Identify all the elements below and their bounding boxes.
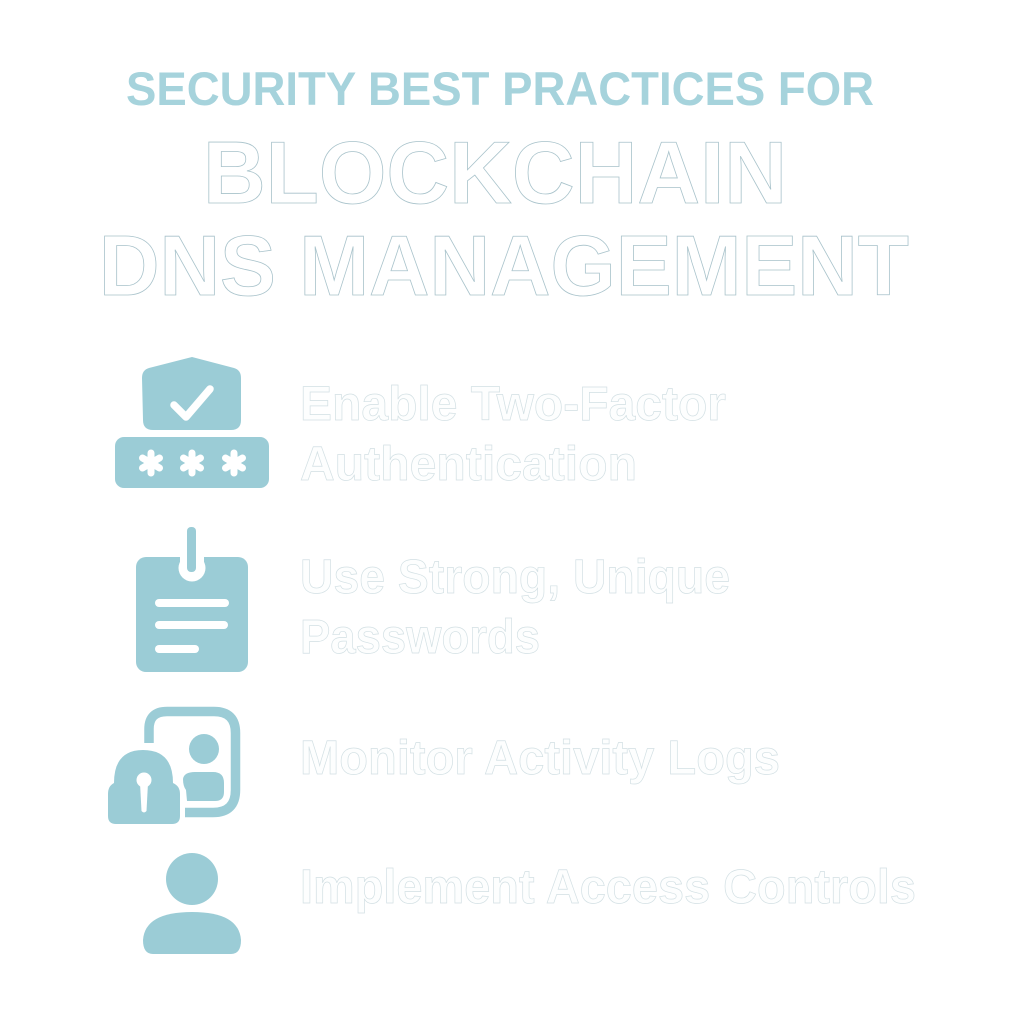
- label: enable two-factor authentication: [300, 378, 726, 491]
- practice: access controls: [143, 853, 916, 954]
- practice: two-factor authentication: [115, 357, 726, 491]
- label: implement access controls: Implement Access Controls: [300, 861, 916, 914]
- practice: strong passwords: [136, 527, 730, 672]
- label: use strong, unique passwords: Passwords: [300, 611, 540, 664]
- title block: [99, 62, 909, 314]
- label: enable two-factor authentication: Enable Two-Factor: [300, 378, 726, 431]
- label: use strong, unique passwords: Use Strong, Unique: [300, 551, 730, 604]
- label: use strong, unique passwords: [300, 551, 730, 664]
- title line: blockchain: BLOCKCHAIN: [203, 123, 787, 222]
- icon: person: [143, 853, 241, 954]
- label: enable two-factor authentication: Authentication: [300, 438, 637, 491]
- title kicker: SECURITY BEST PRACTICES FOR: [126, 62, 874, 115]
- icon: shield with check and password field: [115, 357, 269, 488]
- icon: padlock with user frame: [108, 712, 236, 824]
- title line: DNS management: DNS MANAGEMENT: [99, 219, 909, 314]
- label: monitor activity logs: Monitor Activity Logs: [300, 732, 780, 785]
- practice: monitor activity logs: [108, 712, 780, 824]
- icon: clipboard note with pin: [136, 527, 248, 672]
